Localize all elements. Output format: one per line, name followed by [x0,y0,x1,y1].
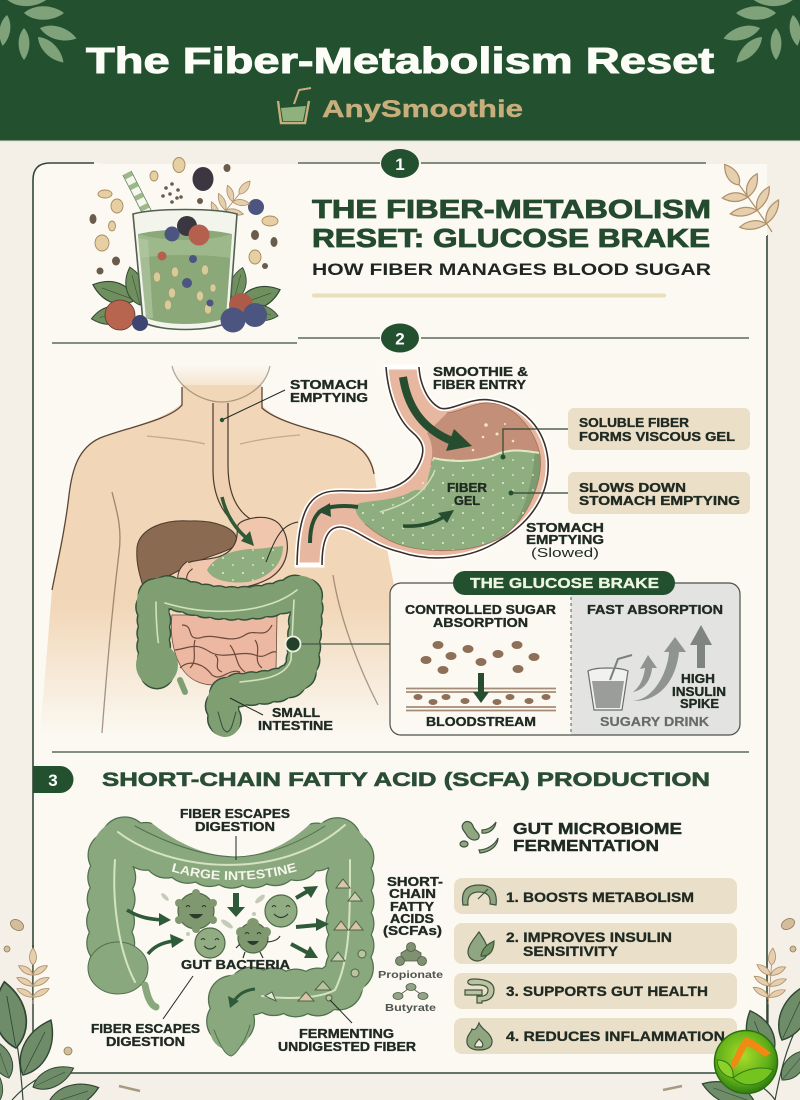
subheading: HOW FIBER MANAGES BLOOD SUGAR [312,261,711,279]
gel label: FIBER [447,481,487,495]
bacteria 4 [236,918,280,958]
bacteria 1 [175,889,217,933]
decoration: bottom right plant [699,979,800,1100]
panel: main content frame [33,163,767,1073]
logo: green orb [714,1030,778,1094]
benefit 1: 1. BOOSTS METABOLISM [506,889,694,905]
left heading: ABSORPTION [433,616,528,630]
spike label: SPIKE [680,697,719,711]
berries at base [105,300,135,330]
icon: gut [465,979,494,1003]
heading: section 1 title [312,196,711,253]
small stomach [182,517,287,589]
label: gut bacteria: GUT BACTERIA [181,958,290,972]
label: stomach emptying slowed: STOMACH [526,521,604,535]
benefit 2: SENSITIVITY [523,943,619,959]
icon: wheat top right [705,151,791,246]
berries on top [177,216,197,236]
label: fiber escapes bottom: DIGESTION [106,1035,185,1049]
icon: propionate molecule [396,942,426,966]
callout: slows stomach: SLOWS DOWN [579,481,686,495]
callout: slows stomach: STOMACH EMPTYING [579,494,740,508]
badge 1 [381,149,419,178]
brand name: AnySmoothie [322,96,523,123]
arrow into small stomach [222,497,249,540]
callout: soluble fiber: SOLUBLE FIBER [579,416,689,430]
heading: gut microbiome [513,821,682,855]
accent bar [312,294,666,298]
label: smoothie entry: SMOOTHIE & [433,365,528,379]
right half: fast absorption [571,583,740,735]
spike label: INSULIN [672,685,726,699]
label: stomach emptying slowed [526,521,604,560]
fluid chamber [356,403,540,550]
benefit 3: 3. SUPPORTS GUT HEALTH [506,983,708,999]
decoration: scattered seeds [4,916,797,1091]
connector: gel to inset [266,522,298,562]
label: short chain fatty acids: SHORT- [387,875,443,889]
label: short chain fatty acids: FATTY [390,900,435,914]
arrow: entry [403,377,452,441]
label: fermenting fiber: UNDIGESTED FIBER [278,1040,416,1054]
icon: gut microbes [460,822,498,853]
dots in fluid [472,423,514,451]
decoration: wheat bottom left [17,948,49,1004]
gel in small stomach [207,546,283,582]
heading: gut microbiome: FERMENTATION [513,838,659,855]
callout: slows stomach [508,472,750,514]
heading: section 1 title: THE FIBER-METABOLISM [312,196,711,224]
glass [133,210,237,330]
label: large intestine [170,871,297,880]
label: short chain fatty acids: (SCFAs) [383,924,442,938]
label: butyrate: Butyrate [385,1002,436,1014]
body [40,385,395,735]
fiber particles [160,892,266,936]
inner lining [365,403,540,551]
label: stomach emptying: EMPTYING [290,391,368,405]
section dividers [52,163,749,752]
header band [0,0,800,142]
bacteria 2 [265,895,297,927]
callout: soluble fiber: FORMS VISCOUS GEL [579,430,735,444]
left heading [405,603,556,630]
arrows: rising spike [632,625,712,701]
label: stomach emptying: STOMACH [290,378,368,392]
badge 3: 3 [48,771,58,790]
spike label [672,672,726,711]
leaves [89,265,284,328]
label: short chain fatty acids [383,875,443,938]
right heading: FAST ABSORPTION [587,603,723,617]
bloodstream label: BLOODSTREAM [426,715,536,729]
icon: header leaves right [722,0,800,67]
top sag of the transverse colon [135,808,325,857]
sugar particles [414,641,550,705]
benefit 1 [454,878,737,914]
duodenum [182,565,232,598]
label: fiber escapes top: DIGESTION [195,820,275,834]
label: stomach emptying slowed: (Slowed) [531,546,599,560]
label: stomach emptying [220,378,368,422]
label: small intestine: INTESTINE [258,719,333,733]
callout: soluble fiber [500,408,750,460]
liver [137,521,237,586]
illustration: large intestine [88,808,350,1056]
label: small intestine [230,698,333,733]
label: fermenting fiber [278,1000,416,1054]
icon: gauge [462,885,496,905]
label: fiber escapes bottom: FIBER ESCAPES [91,1022,200,1036]
gut bacteria group [160,889,297,958]
benefit 2: 2. IMPROVES INSULIN [506,929,672,945]
bloodstream walls [406,688,556,710]
decoration: wheat bottom right [752,947,789,1005]
gel label: GEL [454,494,480,508]
illustration: stomach close-up [297,367,550,565]
left heading: CONTROLLED SUGAR [405,603,556,617]
arrow: within gel [403,516,445,526]
pill title: THE GLUCOSE BRAKE [470,576,659,592]
small intestine [171,615,277,685]
label: propionate: Propionate [378,969,443,981]
heading: section 3: SHORT-CHAIN FATTY ACID (SCFA) PRODUCTION [102,769,710,791]
icon: sugary drink [588,655,632,710]
benefit 4 [454,1018,737,1054]
text: LARGE INTESTINE [172,862,297,880]
decoration: bottom left plant [0,945,102,1100]
icon: butyrate molecule [393,984,428,1000]
bacteria 3 [195,928,225,958]
panel: the glucose brake [390,571,740,735]
heading: section 1 title: RESET: GLUCOSE BRAKE [312,225,710,253]
icon: flame [467,1023,492,1050]
label: fiber escapes bottom [91,976,200,1049]
badge 2 [381,324,419,352]
label: short chain fatty acids: CHAIN [389,887,436,901]
label: smoothie entry [433,365,528,392]
label: fiber escapes top: FIBER ESCAPES [180,807,290,821]
spike label: HIGH [681,672,715,686]
arrow: slow entry [478,673,484,693]
benefit 3 [454,973,737,1009]
pill title [453,571,675,595]
highlights [114,825,350,998]
esophagus [213,403,252,530]
gel label [447,481,487,508]
connector: intestine to glucose brake [286,636,390,652]
scfa shapes in colon [265,879,366,1001]
benefit 4: 4. REDUCES INFLAMMATION [506,1028,725,1044]
badge 1: 1 [395,155,405,174]
label: smoothie entry: FIBER ENTRY [433,378,527,392]
label: fiber escapes top [180,807,290,860]
heading: gut microbiome: GUT MICROBIOME [513,821,682,838]
illustration: smoothie glass [89,158,284,332]
icon: smoothie logo glass [278,88,311,123]
label: fermenting fiber: FERMENTING [299,1027,394,1041]
badge 3 [33,766,74,793]
label: stomach emptying slowed: EMPTYING [526,533,604,547]
label: short chain fatty acids: ACIDS [390,912,434,926]
large intestine [136,590,307,732]
stomach wall [297,367,548,565]
straw [127,173,158,234]
icon: drop and leaf [468,932,494,961]
arrows: fiber to bacteria and scfa [127,886,329,1008]
badge 2: 2 [395,330,405,348]
wheat stalk [202,171,262,234]
icon: header leaves left [0,0,78,67]
illustration: human torso [40,365,395,735]
oats and seeds [95,158,278,264]
title: The Fiber-Metabolism Reset [86,40,714,81]
label: small intestine: SMALL [272,706,320,720]
benefit 2 [454,923,737,964]
arrow: duodenum [310,506,358,543]
sugary drink label: SUGARY DRINK [600,715,709,729]
